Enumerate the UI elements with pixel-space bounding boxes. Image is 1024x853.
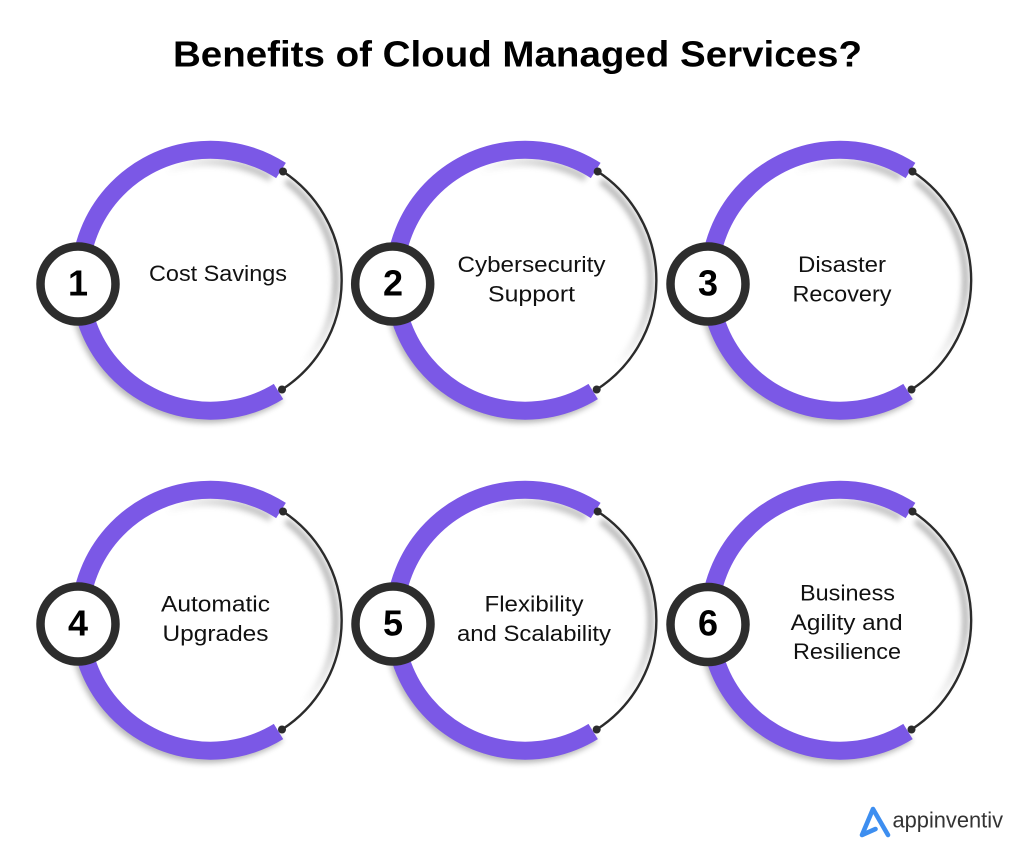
panel: 4 Automatic Upgrades: Automatic [161, 592, 270, 616]
panel: 5 Flexibility and Scalability: and Scalability [457, 621, 611, 646]
panel: 2 Cybersecurity Support [355, 150, 656, 418]
panel: 5 Flexibility and Scalability [356, 490, 656, 758]
panel: 4 Automatic Upgrades: 4 [68, 602, 88, 644]
panel: 3 Disaster Recovery: Disaster [798, 252, 886, 277]
panel: 1 Cost Savings [40, 150, 342, 418]
panel: 3 Disaster Recovery [670, 150, 971, 418]
panel: 3 Disaster Recovery: 3 [698, 262, 718, 304]
panel: 4 Automatic Upgrades: Upgrades [162, 621, 268, 646]
panel: 5 Flexibility and Scalability: Flexibility [485, 592, 584, 616]
panel: 1 Cost Savings: 1 [68, 262, 88, 304]
title: Benefits of Cloud Managed Services? [173, 34, 862, 74]
panel: 1 Cost Savings: Cost Savings [149, 261, 287, 286]
panel: 6 Business Agility and Resilience [670, 490, 971, 758]
logo: appinventiv [862, 808, 1003, 835]
logo wordmark: appinventiv [892, 808, 1003, 832]
panel: 6 Business Agility and Resilience: 6 [698, 602, 718, 644]
panel: 2 Cybersecurity Support: 2 [383, 262, 403, 304]
panel: 6 Business Agility and Resilience: Business [800, 581, 895, 606]
panel: 6 Business Agility and Resilience: Resilience [793, 639, 901, 664]
panel: 2 Cybersecurity Support: Support [488, 282, 575, 306]
icon: logo arrow [862, 809, 888, 835]
panel: 2 Cybersecurity Support: Cybersecurity [458, 252, 606, 277]
panel: 4 Automatic Upgrades [40, 490, 342, 758]
panel: 3 Disaster Recovery: Recovery [792, 282, 892, 306]
panel: 6 Business Agility and Resilience: Agility and [791, 610, 903, 635]
panel: 5 Flexibility and Scalability: 5 [383, 602, 403, 644]
